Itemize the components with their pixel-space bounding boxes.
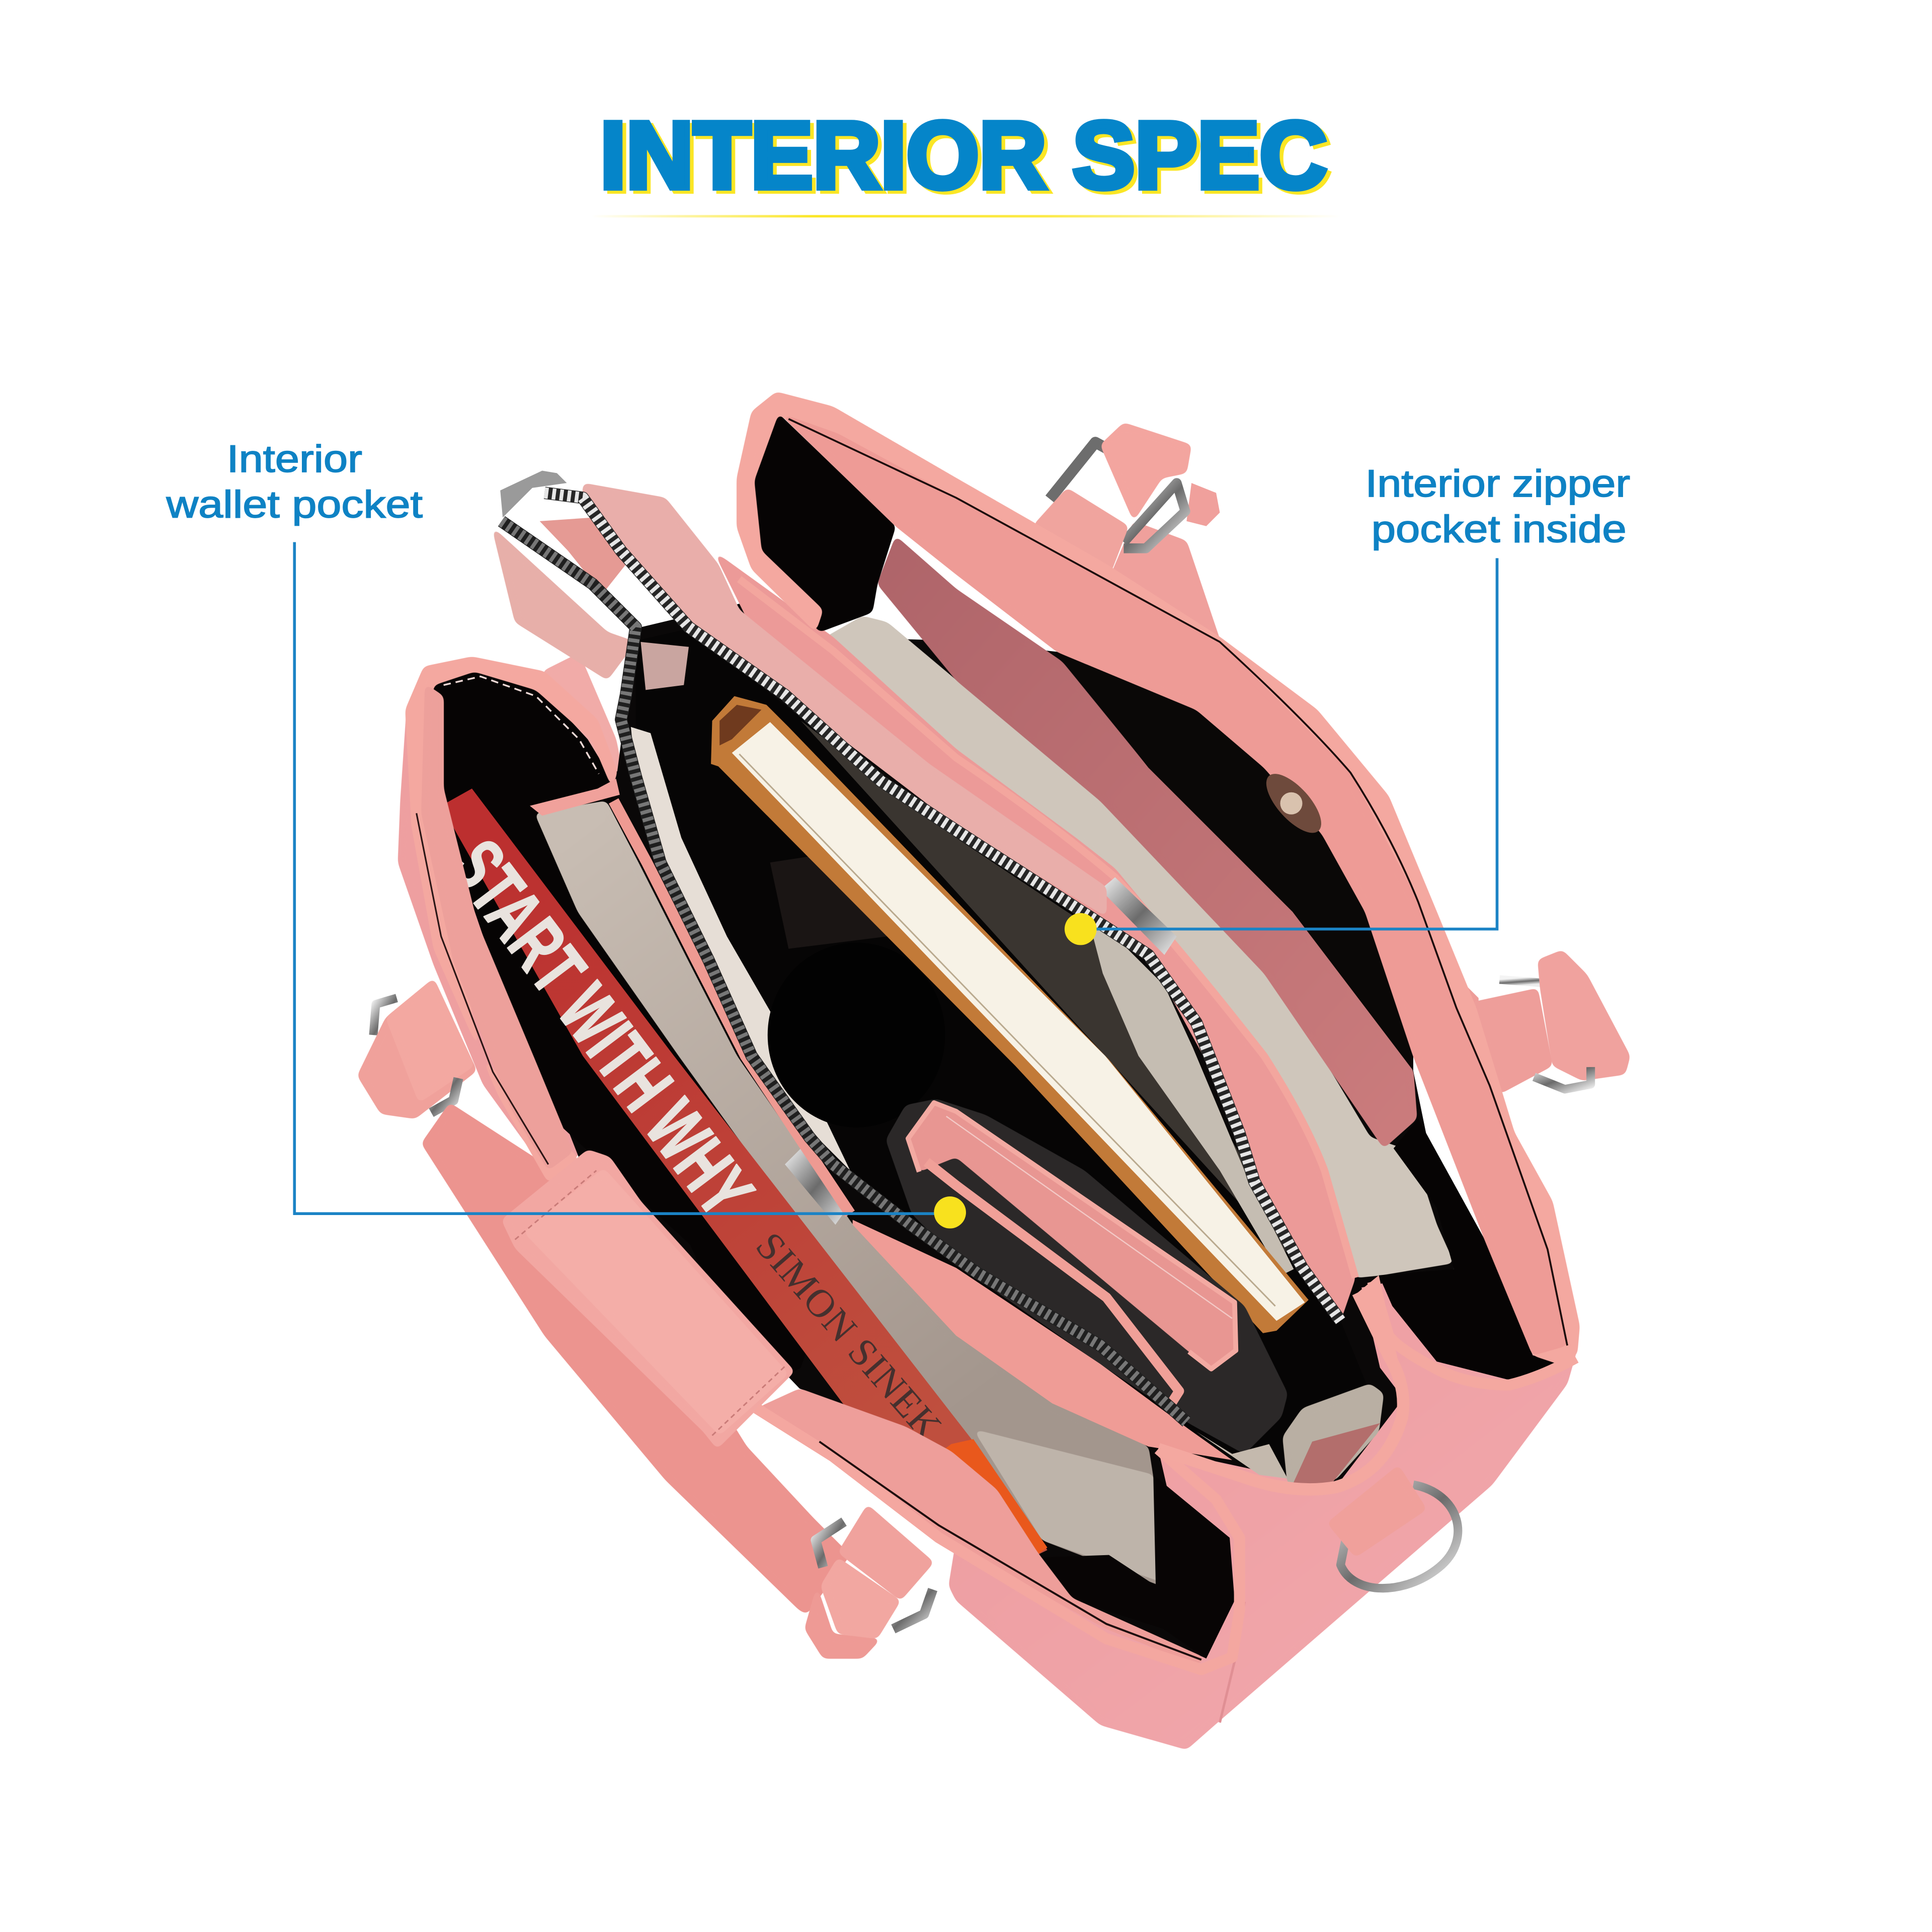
title: INTERIOR SPEC: [604, 105, 1331, 211]
title: INTERIOR SPEC: [600, 102, 1327, 208]
leader line left: [294, 542, 942, 1214]
orange book end: [918, 1439, 1048, 1572]
upper wall left black pocket: [749, 412, 896, 632]
left wall exterior: [398, 710, 616, 1183]
right pocket black: [1379, 1119, 1572, 1380]
lining scrap: [640, 642, 689, 690]
upper mid pink panel: [713, 551, 1355, 1321]
book title: START WITH WHY: [433, 825, 769, 1233]
yellow marker: [934, 1196, 966, 1229]
callout: interior zipper pocket: [1065, 462, 1630, 945]
left pocket black: [426, 672, 813, 1392]
lower pocket black: [1042, 1475, 1235, 1658]
metal clip upper: [1100, 877, 1177, 955]
body crease: [1220, 1602, 1244, 1723]
behind rim piece: [542, 653, 628, 801]
front wall rim and panel: [757, 1389, 1240, 1669]
double rim fold: [1358, 1275, 1400, 1367]
right pocket rim: [1373, 1281, 1576, 1385]
wallet: [886, 1099, 1287, 1454]
herringbone lower lining: [974, 1429, 1166, 1583]
middle pink pocket panel: [853, 1220, 1232, 1460]
bag body: [949, 1269, 1577, 1750]
metal clip lower: [785, 1148, 848, 1225]
lower side tab: [804, 1504, 934, 1658]
yellow marker: [1065, 913, 1097, 945]
black between handle and wall: [1057, 652, 1413, 1071]
label: interior wallet pocket: wallet pocket: [166, 484, 423, 526]
book with pages: [711, 696, 1309, 1333]
lower handle strap: [422, 1103, 850, 1614]
mauve top handle: [877, 536, 1417, 1148]
callout: interior wallet pocket: [166, 438, 966, 1229]
left side tab: [357, 978, 477, 1119]
upper zipper tape: [583, 483, 1106, 917]
red book: [433, 788, 1048, 1572]
snap button: [1257, 765, 1330, 842]
inner pink loop: [540, 518, 626, 594]
crumpled lining: [1282, 1384, 1384, 1485]
centre cup rim: [1158, 1293, 1403, 1489]
label: interior zipper pocket: Interior zipper: [1365, 462, 1630, 505]
book author: SIMON SINEK: [748, 1224, 950, 1448]
right side tab: [1454, 950, 1630, 1094]
centre cavity black: [636, 628, 1380, 1479]
label: interior wallet pocket: Interior: [227, 438, 362, 480]
D ring: [1327, 1465, 1458, 1588]
pocket stitching: [444, 676, 599, 774]
upper zipper: [544, 493, 1340, 1321]
title underline: [592, 215, 1340, 217]
left taupe lining: [535, 801, 1171, 1589]
upper wall stitch line: [788, 419, 1567, 1345]
top handle strap and tabs: [1032, 423, 1222, 647]
lining at bag base: [1196, 1432, 1287, 1479]
upper wall rim: [737, 392, 1580, 1365]
beige strip by lower zipper: [631, 727, 850, 1171]
lower handle cuff: [502, 1150, 795, 1449]
label: interior zipper pocket: pocket inside: [1372, 508, 1627, 551]
upper wall panel: [779, 413, 1567, 1355]
leader line right: [1094, 558, 1497, 929]
dark pocket lining: [801, 721, 1303, 1269]
mauve fold: [1293, 1423, 1380, 1485]
upper beige lining: [820, 616, 1454, 1278]
bag illustration: [357, 392, 1630, 1750]
left wall rim and panel: [406, 657, 620, 1183]
light zip lining strip: [1090, 927, 1294, 1275]
zipper slider: [500, 471, 567, 518]
upper mid rim: [739, 579, 1355, 1278]
left zipper pink edge: [614, 801, 850, 1214]
lower zipper: [502, 521, 1186, 1422]
lower zipper tape: [492, 526, 636, 680]
interior dark underlay: [441, 604, 1454, 1658]
sunglasses: [768, 850, 945, 1128]
